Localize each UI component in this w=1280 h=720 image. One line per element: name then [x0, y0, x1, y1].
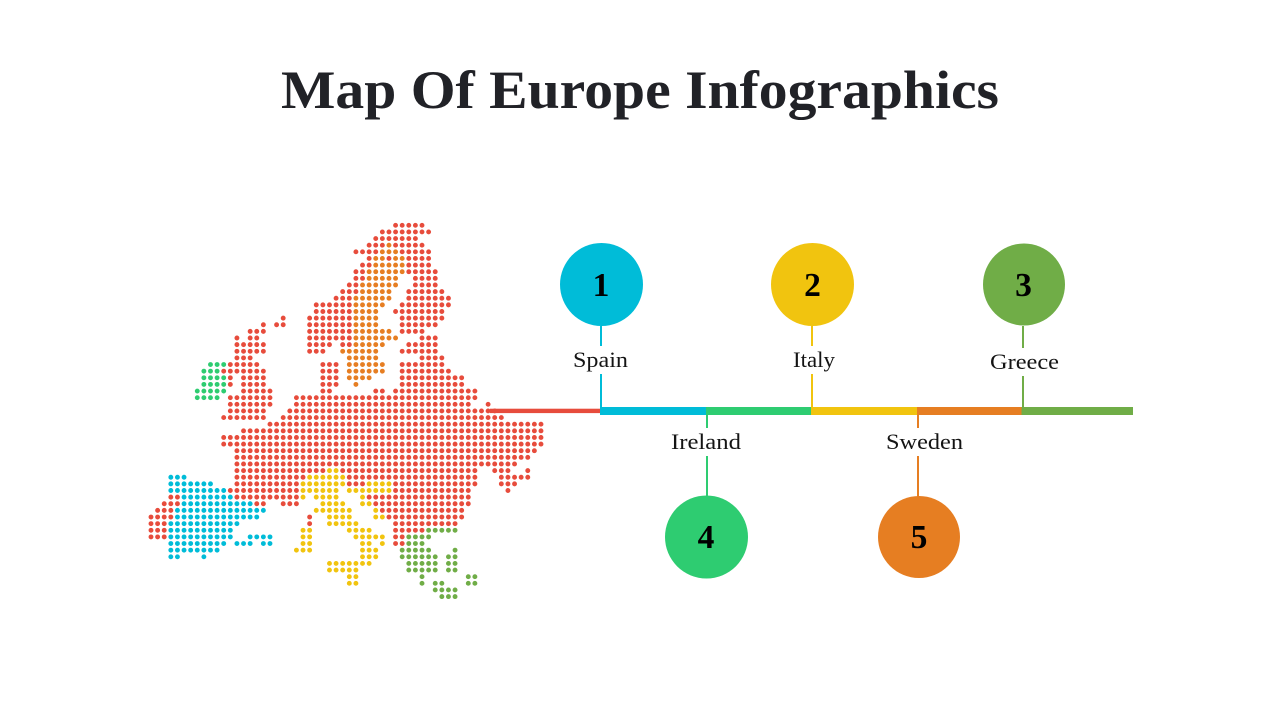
- marker 3: Greece: Greece: [990, 349, 1059, 374]
- marker 1: Spain: 1: [593, 267, 609, 304]
- marker 4: Ireland: Ireland: [671, 429, 741, 454]
- map region: rest of Europe (red): [151, 225, 541, 544]
- marker 3: Greece: [983, 244, 1065, 407]
- dotted map of Europe: [151, 225, 541, 597]
- marker 2: Italy: Italy: [793, 347, 835, 372]
- marker 4: Ireland: 4: [698, 519, 715, 556]
- title: Map Of Europe Infographics: [281, 59, 999, 120]
- marker 1: Spain: Spain: [573, 347, 628, 372]
- map region: Greece (olive green): [402, 530, 475, 597]
- marker 3: Greece: 3: [1015, 267, 1032, 304]
- marker 5: Sweden: 5: [911, 519, 927, 556]
- timeline bar: [490, 407, 1133, 415]
- marker 1: Spain: [560, 243, 643, 407]
- marker 2: Italy: 2: [804, 267, 821, 304]
- map region: Spain (cyan): [171, 477, 270, 557]
- map region: Ireland (green): [197, 365, 224, 398]
- marker 5: Sweden: Sweden: [886, 429, 963, 454]
- marker 5: Sweden: [878, 415, 963, 578]
- map region: Italy (yellow): [296, 471, 389, 583]
- marker 4: Ireland: [665, 415, 748, 578]
- marker 2: Italy: [771, 243, 854, 407]
- map region: Sweden (orange): [343, 245, 402, 384]
